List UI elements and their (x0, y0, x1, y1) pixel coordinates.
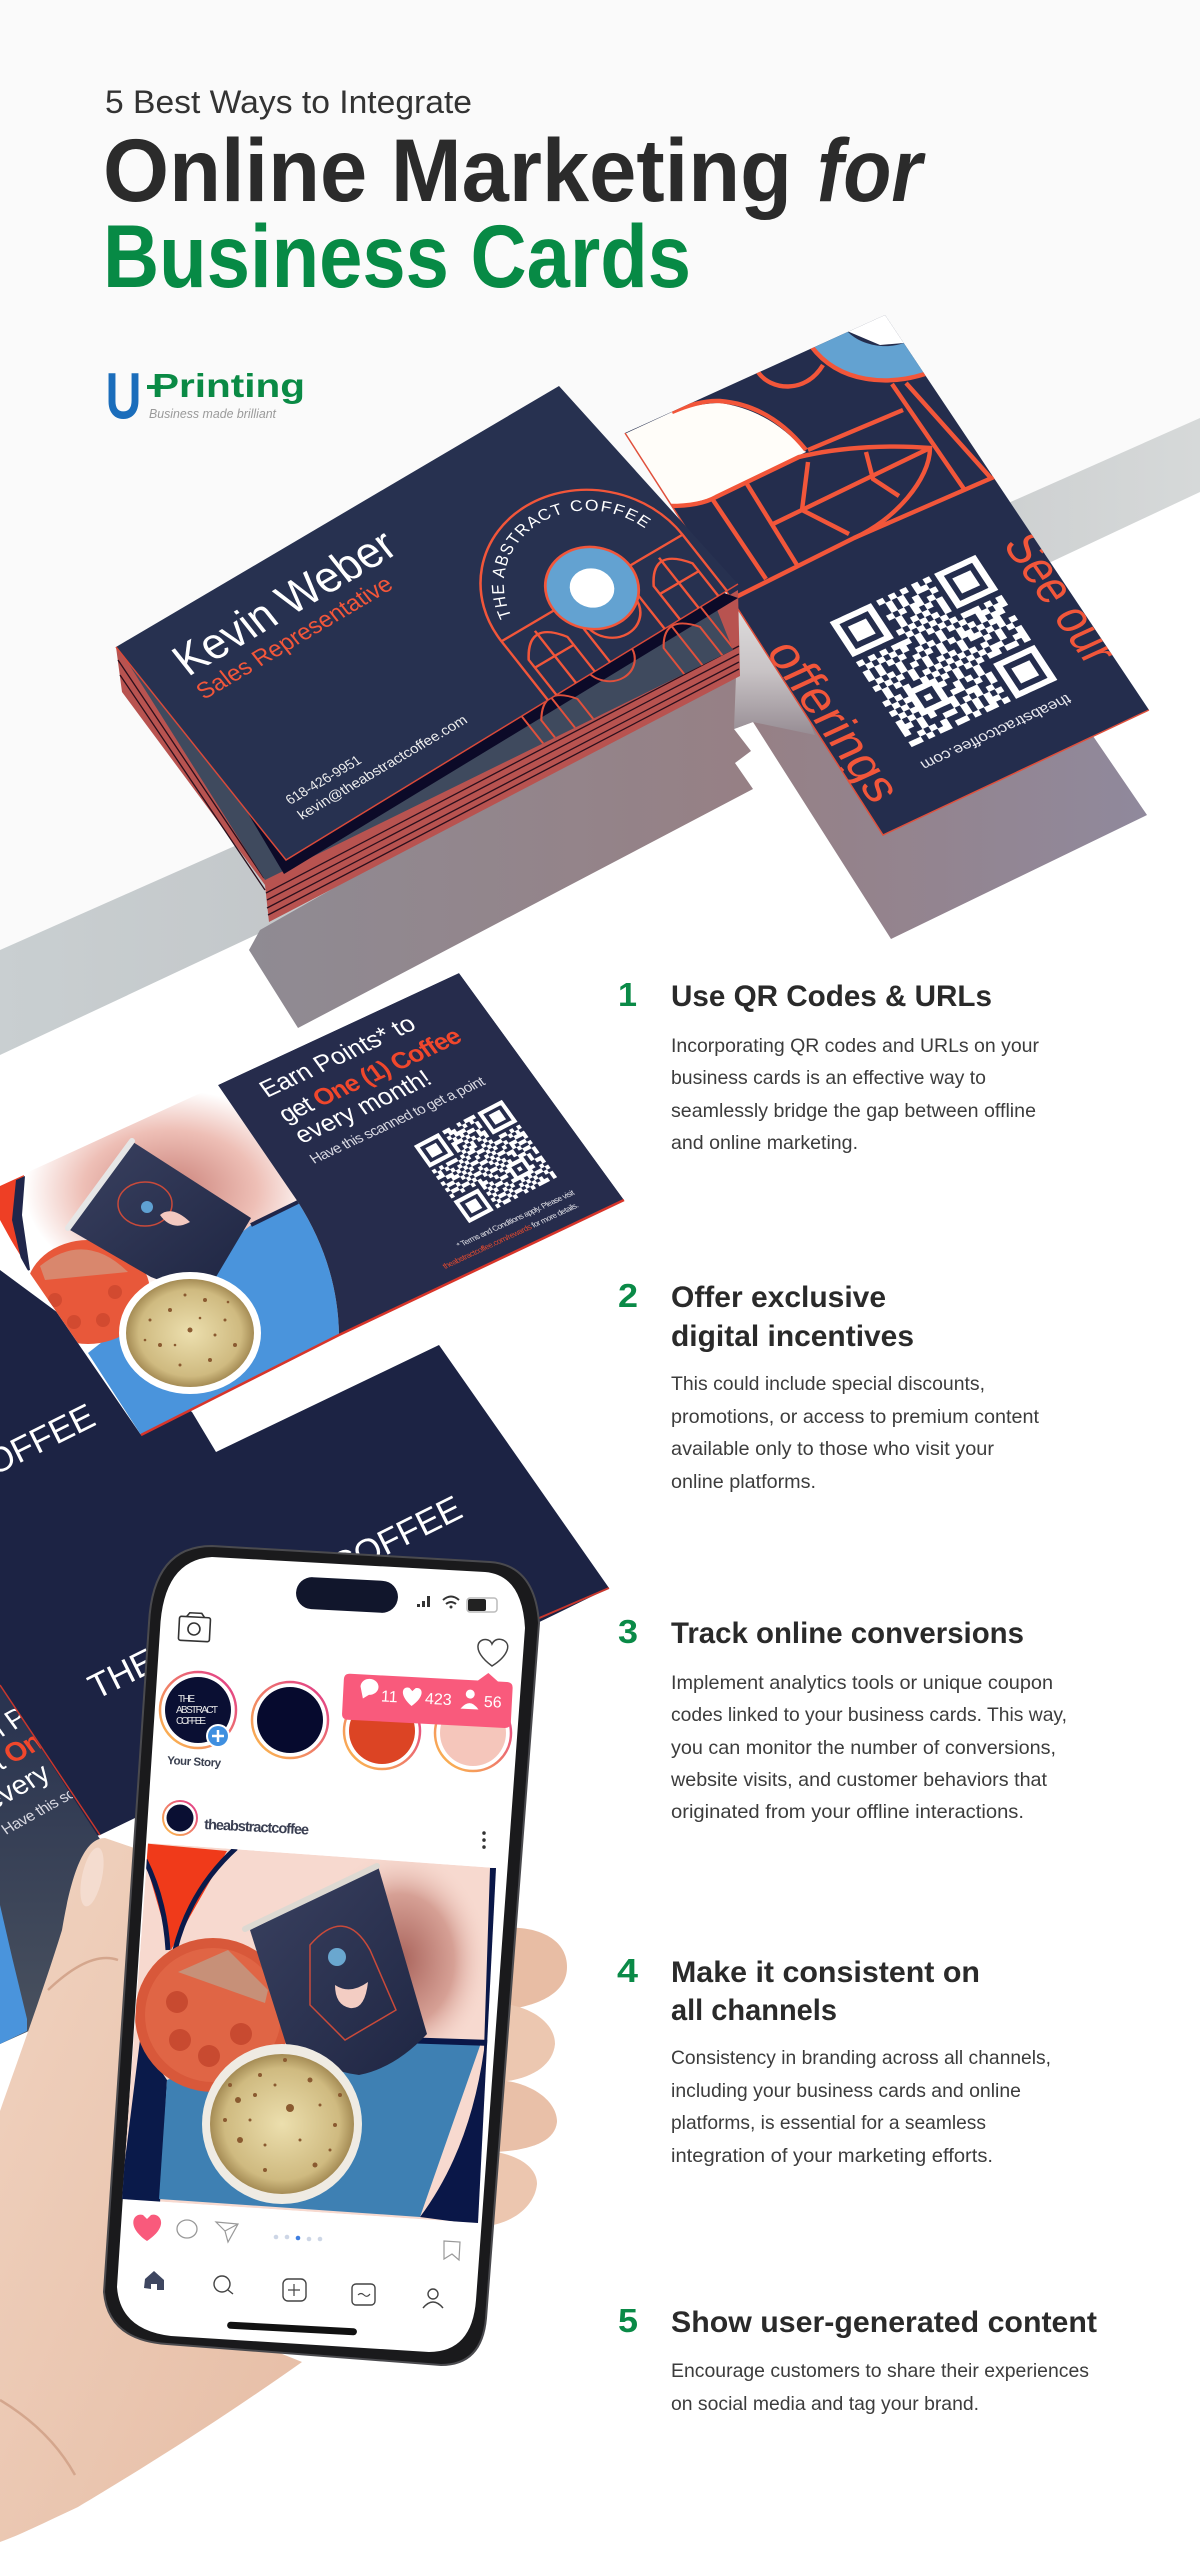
post photo (120, 1843, 500, 2225)
logo showing on layer below (521, 607, 733, 744)
job title: Sales Representative (191, 571, 398, 705)
UPrinting logo (106, 362, 305, 430)
step 4 body: platforms, is essential for a seamless (671, 2112, 986, 2134)
step 4 (617, 1952, 1051, 2167)
second layer (120, 597, 733, 880)
blue arc panel (88, 1202, 339, 1435)
top business card Kevin Weber (116, 386, 738, 861)
step 2 heading: digital incentives (671, 1320, 914, 1353)
step 1 body: seamlessly bridge the gap between offline (671, 1100, 1036, 1122)
label: your story: Your Story (167, 1755, 222, 1770)
rewards headline: get One (1) Coffee (273, 1023, 467, 1128)
step 2 body (671, 1373, 1040, 1493)
title italic for: for (817, 120, 926, 220)
step 1 heading: Use QR Codes & URLs (671, 980, 992, 1013)
contact details: 618-426-9951 (282, 752, 364, 807)
subtitle: 5 Best Ways to Integrate (105, 84, 472, 120)
story: your story: COFFEE (176, 1716, 206, 1727)
step 2 body: promotions, or access to premium content (671, 1406, 1040, 1428)
step 2 body: available only to those who visit your (671, 1438, 995, 1460)
stories row (160, 1672, 511, 1771)
navy panel with text (218, 973, 624, 1335)
shelf highlight fading into shadow beside the stack (734, 590, 815, 735)
step 3 body: Implement analytics tools or unique coupon (671, 1672, 1053, 1694)
blue arch top (811, 331, 925, 380)
step 4 number: 4 (617, 1952, 639, 1989)
step 1 body (671, 1035, 1040, 1154)
smartphone (104, 1546, 539, 2365)
name: Kevin Weber (162, 519, 406, 685)
status icons (417, 1596, 497, 1612)
post photo: cup (245, 1866, 427, 2075)
step 2 (618, 1277, 1040, 1493)
title line one: Online Marketing (103, 120, 792, 220)
post photo: lid (135, 1938, 291, 2092)
step 2 heading: Offer exclusive (671, 1281, 886, 1314)
step 4 heading (671, 1956, 980, 2027)
stack edges (116, 590, 740, 922)
card cast shadow (249, 600, 1147, 1028)
post photo: coffee (202, 2044, 362, 2204)
coffee (119, 1272, 261, 1394)
stack of business cards (116, 590, 748, 922)
step 2 body: This could include special discounts, (671, 1373, 985, 1395)
step 1 body: and online marketing. (671, 1132, 858, 1154)
QR code on rewards card (415, 1102, 556, 1221)
phone screen (117, 1557, 525, 2352)
lower-left partial rewards card: Have this scanned to get a point (0, 1722, 193, 1838)
notification tooltip (342, 1665, 513, 1728)
portrait business card with QR (620, 310, 1149, 835)
step 5 body (671, 2360, 1089, 2415)
story 4 (435, 1695, 511, 1771)
contact details: kevin@theabstractcoffee.com (294, 712, 470, 822)
hand holding phone (0, 1838, 567, 2542)
step 4 body: including your business cards and online (671, 2080, 1021, 2102)
step 4 body: integration of your marketing efforts. (671, 2145, 993, 2167)
big navy business card with logo text (0, 1270, 609, 1860)
step 4 body: Consistency in branding across all channels, (671, 2047, 1051, 2069)
rewards fine print: * Terms and Conditions apply. Please visit (455, 1188, 577, 1250)
step 1 number: 1 (618, 976, 637, 1013)
QR code on portrait card (833, 556, 1054, 746)
icon: camera (178, 1612, 211, 1642)
step 2 number: 2 (618, 1277, 638, 1314)
UPrinting logo: Printing (152, 367, 305, 404)
notification tooltip: 56 (483, 1694, 502, 1712)
rewards headline: every month! (289, 1065, 437, 1149)
step 5 (618, 2302, 1097, 2415)
orange lid (26, 1240, 150, 1344)
step 5 number: 5 (618, 2302, 638, 2339)
rewards card with coffee photo (0, 973, 624, 1435)
step 2 body: online platforms. (671, 1471, 816, 1493)
step 1 body: Incorporating QR codes and URLs on your (671, 1035, 1040, 1057)
grey shelf band (0, 418, 1200, 1055)
step 4 body (671, 2047, 1051, 2167)
post actions (133, 2215, 460, 2260)
card url: theabstractcoffee.com (917, 691, 1074, 773)
title block (103, 84, 926, 306)
palm creases (0, 1958, 118, 2475)
UPrinting logo: U (106, 362, 141, 430)
step 1 body: business cards is an effective way to (671, 1067, 986, 1089)
UPrinting logo: Business made brilliant (149, 406, 277, 421)
card text: see our: See our (991, 525, 1130, 672)
icon: heart outline (478, 1639, 508, 1666)
step 3 number: 3 (618, 1613, 638, 1650)
notification tooltip: 423 (424, 1691, 452, 1709)
notification tooltip: 11 (381, 1688, 398, 1706)
lower-left partial rewards card (0, 1684, 101, 2044)
title line two: Business Cards (103, 206, 691, 306)
white panel on card (620, 403, 806, 506)
step 3 body: you can monitor the number of conversions, (671, 1737, 1056, 1759)
step 3 (618, 1613, 1067, 1823)
thumb nail (76, 1846, 108, 1908)
step 3 heading: Track online conversions (671, 1617, 1024, 1650)
step 2 heading (671, 1281, 914, 1353)
card text: offerings: offerings (755, 632, 914, 810)
story: your story (160, 1672, 236, 1748)
rewards headline (254, 1010, 489, 1167)
step 3 body: codes linked to your business cards. This way, (671, 1704, 1067, 1726)
story: your story: THE (178, 1694, 195, 1705)
rewards fine print: theabstractcoffee.com/rewards for more details. (441, 1201, 580, 1271)
dynamic island (295, 1576, 399, 1614)
step 3 body: originated from your offline interactions. (671, 1801, 1024, 1823)
step 5 body: Encourage customers to share their experiences (671, 2360, 1089, 2382)
story 3 (344, 1693, 420, 1769)
step 5 body: on social media and tag your brand. (671, 2393, 979, 2415)
step 3 body (670, 1672, 1067, 1823)
home indicator (227, 2322, 357, 2335)
step 1 (618, 976, 1040, 1154)
stained-glass line art (670, 346, 994, 598)
rewards headline: Have this scanned to get a point (307, 1074, 489, 1167)
coffee shop arch logo (479, 488, 728, 700)
paper cup (68, 1141, 251, 1284)
bottom navigation (144, 2271, 443, 2308)
step 3 body: website visits, and customer behaviors that (670, 1769, 1048, 1791)
big navy business card with logo text: THE ABSTRACT COFFEE (82, 1488, 468, 1707)
coffee shop arch logo: THE ABSTRACT COFFEE (492, 500, 651, 620)
post header (163, 1801, 484, 1847)
step 4 heading: all channels (671, 1994, 837, 2027)
rewards headline: Earn Points* to (254, 1010, 421, 1103)
step 4 heading: Make it consistent on (671, 1956, 980, 1989)
post header: theabstractcoffee (204, 1817, 309, 1838)
story 2 (252, 1682, 328, 1758)
step 5 heading: Show user-generated content (671, 2306, 1097, 2339)
story: your story: ABSTRACT (176, 1705, 218, 1716)
